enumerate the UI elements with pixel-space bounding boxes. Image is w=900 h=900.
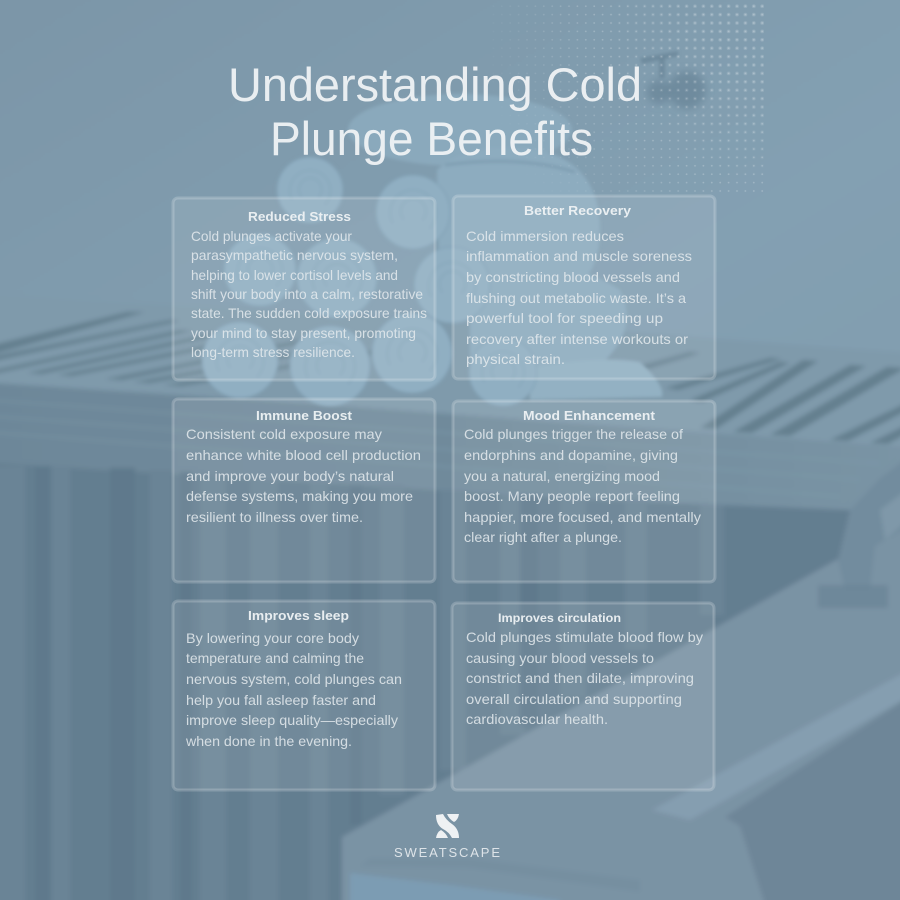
body: Mood Enhancement: clear right after a plunge. [464,529,622,545]
body: Reduced Stress: state. The sudden cold exposure trains [191,305,427,321]
logo: Sweatscape: SWEATSCAPE [394,845,500,860]
body: Reduced Stress [191,228,427,360]
panel: Reduced Stress [173,198,435,380]
body: Improves sleep [185,630,402,749]
body: Reduced Stress: your mind to stay present, promoting [191,325,416,341]
body: Better Recovery: flushing out metabolic waste. It’s a [466,290,686,306]
body: Mood Enhancement [464,426,701,545]
panel: Mood Enhancement [453,401,715,582]
body: Mood Enhancement: happier, more focused, and mentally [464,509,701,525]
body: Reduced Stress: parasympathetic nervous system, [191,247,398,263]
panel: Better Recovery [453,196,715,379]
heading: Improves circulation: Improves circulation [498,611,621,625]
heading: Better Recovery: Better Recovery [524,203,632,218]
body: Better Recovery: Cold immersion reduces [466,228,624,244]
body: Improves sleep: temperature and calming the [186,650,364,666]
body: Reduced Stress: helping to lower cortisol levels and [191,267,398,283]
body: Immune Boost: resilient to illness over time. [186,509,363,525]
panel: Improves sleep [173,601,435,790]
icon: faucet handle [640,51,678,78]
body: Improves circulation: overall circulation and supporting [466,691,682,707]
body: Mood Enhancement: you a natural, energizing mood [464,468,660,484]
body: Better Recovery [466,228,692,367]
title: Plunge Benefits [270,112,593,165]
panel: Immune Boost [173,399,435,582]
body: Immune Boost: and improve your body’s natural [186,468,394,484]
body: Reduced Stress: long-term stress resilience. [191,344,355,360]
body: Mood Enhancement: Cold plunges trigger the release of [464,426,683,442]
title: Understanding Cold [228,58,642,111]
body: Improves sleep: improve sleep quality—especially [186,712,398,728]
title [228,58,642,165]
body: Immune Boost [186,426,421,525]
body: Immune Boost: Consistent cold exposure may [186,426,382,442]
body: Improves sleep: when done in the evening. [185,733,352,749]
body: Improves circulation [466,629,703,727]
body: Better Recovery: by constricting blood vessels and [466,269,680,285]
heading: Mood Enhancement: Mood Enhancement [523,408,656,423]
body: Improves sleep: nervous system, cold plunges can [186,671,402,687]
body: Reduced Stress: Cold plunges activate your [191,228,352,244]
body: Improves sleep: help you fall asleep faster and [186,692,376,708]
panel: Improves circulation [452,603,714,790]
body: Better Recovery: recovery after intense workouts or [466,331,688,347]
body: Mood Enhancement: boost. Many people report feeling [464,488,680,504]
icon: S mark [436,814,459,838]
body: Immune Boost: defense systems, making you more [186,488,413,504]
body: Improves sleep: By lowering your core body [186,630,359,646]
logo: Sweatscape [394,814,500,860]
heading: Improves sleep: Improves sleep [248,608,349,623]
body: Improves circulation: constrict and then dilate, improving [466,670,694,686]
heading: Reduced Stress: Reduced Stress [248,209,351,224]
body: Better Recovery: inflammation and muscle soreness [466,248,692,264]
icon: blurred faucet [647,71,706,109]
body: Immune Boost: enhance white blood cell production [186,447,421,463]
body: Better Recovery: physical strain. [466,351,565,367]
body: Reduced Stress: shift your body into a calm, restorative [191,286,423,302]
halftone dots [510,4,764,192]
body: Improves circulation: cardiovascular health. [466,711,608,727]
body: Mood Enhancement: endorphins and dopamine, giving [464,447,678,463]
towel stack [202,94,662,406]
body: Improves circulation: causing your blood vessels to [466,650,654,666]
heading: Immune Boost: Immune Boost [256,408,353,423]
body: Better Recovery: powerful tool for speeding up [466,310,663,326]
body: Improves circulation: Cold plunges stimulate blood flow by [466,629,703,645]
